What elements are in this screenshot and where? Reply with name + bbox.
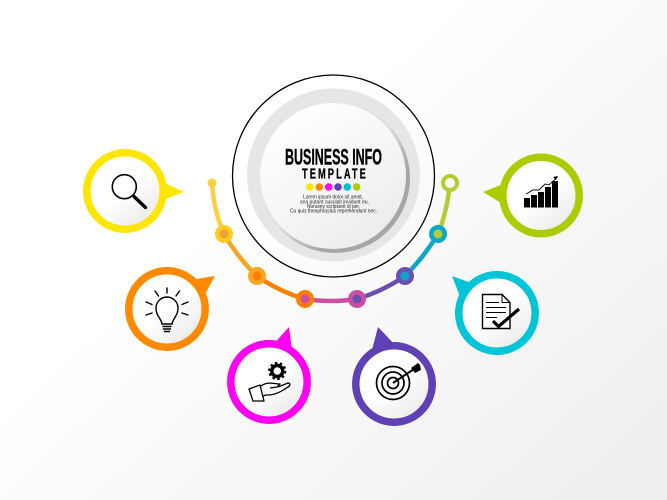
panel: idea	[129, 271, 215, 347]
icon: target with arrow	[376, 363, 421, 400]
icon: bar chart	[524, 176, 558, 208]
central badge	[232, 75, 434, 277]
panel: growth	[483, 157, 579, 234]
panel: target	[356, 327, 432, 422]
heading: template: TEMPLATE	[302, 165, 366, 182]
timeline nodes	[208, 176, 457, 308]
body text: Cu quis theophrastus reprehendunt nec.	[290, 209, 377, 215]
panel: search	[87, 153, 184, 229]
timeline arc	[208, 176, 457, 308]
icon: light bulb	[146, 288, 188, 332]
icon: magnifying glass	[112, 175, 146, 208]
heading: business info: BUSINESS INFO	[285, 144, 382, 170]
panel: service	[231, 327, 307, 420]
colour dots	[306, 183, 361, 191]
icon: document with check	[482, 294, 519, 328]
body text: Lorem ipsum dolor sit amet,	[303, 194, 363, 200]
body text: sea putant suscipit invidunt eu.	[300, 199, 369, 205]
body text: Nonumy scripserit id per.	[307, 204, 360, 210]
icon: hand with gear	[249, 363, 290, 401]
panel: document	[452, 275, 535, 351]
body text	[290, 194, 377, 215]
